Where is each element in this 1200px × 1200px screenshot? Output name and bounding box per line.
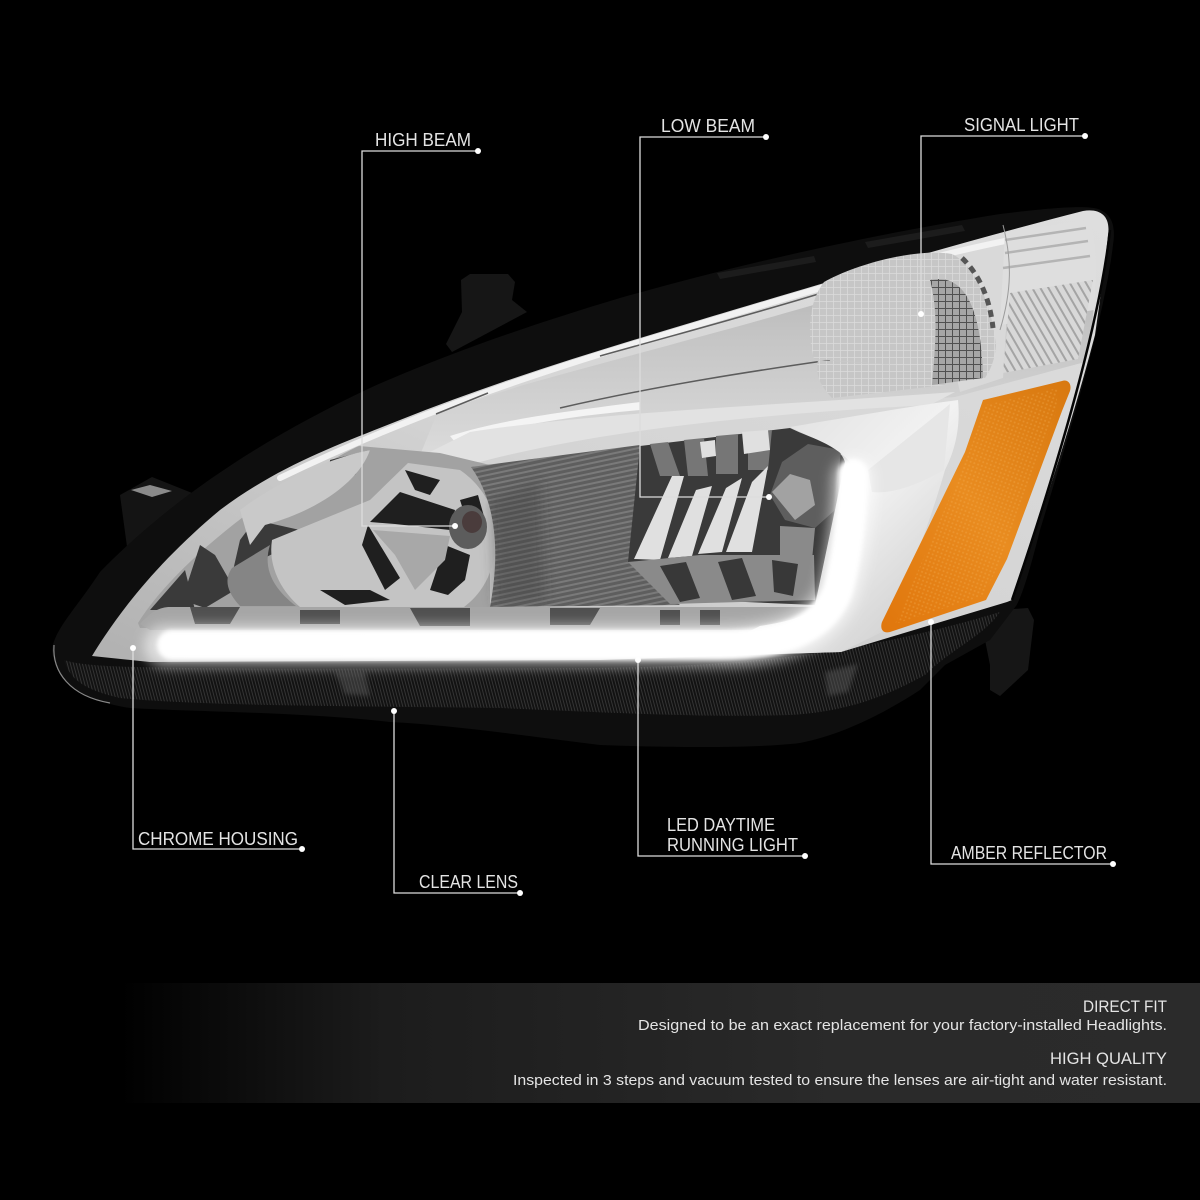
white ridge across top [280, 240, 1010, 478]
DRL light bar [172, 474, 853, 645]
low beam chamber [628, 428, 845, 605]
lower right reflector detail [780, 526, 815, 560]
center ribbed reflector [471, 445, 680, 607]
callout: signal light [918, 115, 1088, 317]
high beam chrome bowl [271, 463, 497, 607]
leader line [931, 622, 1113, 864]
callout: chrome housing [130, 645, 305, 852]
DRL glow [165, 478, 853, 646]
leader line [394, 711, 520, 893]
right rim line [1012, 230, 1110, 600]
dots [391, 708, 523, 896]
bulb highlight [772, 474, 815, 520]
low beam bulb hex [770, 444, 841, 528]
bright slat tips [700, 430, 770, 458]
text: direct fit body: Designed to be an exact replacement for your factory-installed Headlights. [638, 1017, 1167, 1034]
label line one: LED DAYTIME [667, 815, 775, 835]
right bracket [985, 608, 1034, 696]
thin lens seam [1000, 225, 1009, 330]
amber dot texture [895, 388, 1058, 624]
chamber dark shards [150, 450, 370, 610]
dots [763, 134, 772, 500]
bright panel streak [450, 402, 640, 442]
dots [635, 657, 808, 859]
callout: LED daytime running light [635, 657, 808, 859]
light fill behind signal lens [930, 236, 1012, 392]
signal dark grid [930, 279, 983, 385]
amber reflector [881, 381, 1071, 632]
outer black housing [52, 207, 1114, 747]
dots [452, 148, 481, 529]
low beam chrome slats [634, 430, 770, 560]
headlight assembly [52, 207, 1114, 747]
sill strip below reflectors [140, 607, 820, 630]
leader line [133, 648, 302, 849]
left mounting tab [120, 477, 198, 570]
bezel crease shadow [868, 404, 950, 492]
clear corner lens upper [1000, 220, 1096, 325]
lens highlight on left [54, 645, 110, 703]
rib blotches [490, 480, 545, 605]
label: AMBER REFLECTOR [951, 843, 1107, 863]
label: SIGNAL LIGHT [964, 115, 1079, 135]
feature band [0, 983, 1200, 1103]
signal bulb dome [810, 253, 996, 378]
bowl dark reflections [320, 470, 485, 605]
label line two: RUNNING LIGHT [667, 835, 798, 855]
band background [0, 983, 1200, 1103]
left lens projector cone [227, 545, 296, 606]
slat tops [650, 430, 772, 476]
signal lens group [810, 220, 1096, 398]
dots [918, 133, 1088, 317]
slats lower fingers [634, 466, 768, 560]
lower dome [817, 360, 945, 398]
trim blocks [717, 225, 965, 279]
label: CLEAR LENS [419, 872, 518, 892]
clear lens lower strip [64, 612, 1000, 716]
upper chrome panel [418, 228, 1095, 460]
right bezel [700, 400, 959, 656]
label: LOW BEAM [661, 116, 755, 136]
clear corner stripes [1003, 228, 1090, 268]
chrome housing [92, 210, 1108, 662]
bowl grey band [373, 530, 450, 590]
dots [130, 645, 305, 852]
leader line [640, 137, 769, 497]
lens reflection patches [335, 664, 858, 696]
horizontal chrome ledge [430, 392, 955, 462]
dots [928, 619, 1116, 867]
panel lines [436, 292, 830, 414]
sill dark marks [190, 607, 720, 626]
callout: low beam [640, 116, 772, 500]
heading: high quality: HIGH QUALITY [1050, 1049, 1167, 1068]
label: HIGH BEAM [375, 130, 471, 150]
left tab hole [131, 485, 172, 497]
chamber bright panel [240, 450, 370, 545]
diagonal corner lens [1003, 280, 1093, 373]
callout: amber reflector [928, 619, 1116, 867]
text: high quality body: Inspected in 3 steps and vacuum tested to ensure the lenses are air-tight and water resistant. [513, 1072, 1167, 1089]
mosaic darks [660, 558, 798, 602]
label: CHROME HOUSING [138, 829, 298, 849]
high beam bulb [449, 505, 487, 549]
left reflector chamber [138, 446, 490, 628]
leader line [638, 660, 805, 856]
callout: high beam [362, 130, 481, 529]
heading: direct fit: DIRECT FIT [1083, 997, 1167, 1016]
low beam slat tops [650, 430, 772, 476]
leader line [362, 151, 478, 526]
bulb shadow [462, 511, 482, 533]
top mounting tab [446, 274, 527, 352]
leader line [921, 136, 1085, 314]
lower reflector mosaic [628, 555, 815, 604]
signal arc teeth [962, 258, 993, 328]
callout: clear lens [391, 708, 523, 896]
